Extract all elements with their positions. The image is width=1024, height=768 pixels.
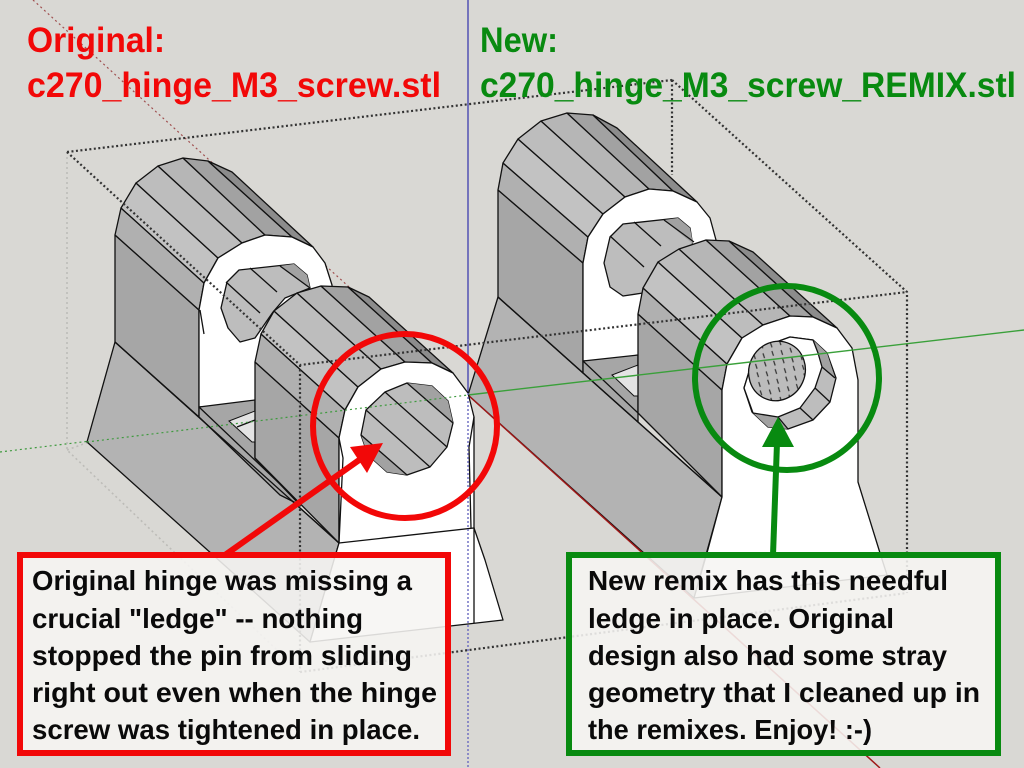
right rear arch bbox=[498, 113, 716, 373]
title: new: c270_hinge_M3_screw_REMIX.stl bbox=[480, 66, 1016, 105]
green highlight circle bbox=[695, 286, 879, 470]
red highlight circle bbox=[313, 334, 497, 518]
dotted guides over the models bbox=[67, 152, 907, 768]
left front white face and flare bbox=[310, 362, 503, 642]
left front arch bbox=[255, 286, 503, 642]
red axis line bbox=[468, 395, 880, 768]
left hinge base bbox=[87, 342, 339, 642]
pin recess bbox=[739, 332, 815, 410]
callout: original hinge: stopped the pin from sliding bbox=[32, 640, 412, 671]
title: original: Original: bbox=[27, 21, 165, 60]
title: original: c270_hinge_M3_screw.stl bbox=[27, 66, 441, 105]
right front white face and flare bbox=[694, 316, 887, 598]
right floor and window bbox=[498, 297, 722, 497]
right hole with new ledge bbox=[739, 332, 836, 429]
callout: new remix: the remixes. Enjoy! :-) bbox=[588, 714, 872, 745]
right front arch bbox=[638, 240, 887, 598]
callout: original hinge: Original hinge was missing a bbox=[32, 565, 412, 596]
callout: new remix bbox=[569, 555, 998, 753]
callout: original hinge: crucial "ledge" -- nothing bbox=[32, 603, 363, 634]
callout: original hinge: screw was tightened in place. bbox=[32, 714, 420, 745]
callout: new remix: ledge in place. Original bbox=[588, 603, 894, 634]
left hole without ledge bbox=[361, 383, 453, 475]
title: new: New: bbox=[480, 21, 558, 60]
right hinge: REMIX model bbox=[468, 113, 887, 598]
callout: original hinge: right out even when the hinge bbox=[32, 677, 437, 708]
callout: new remix: geometry that I cleaned up in bbox=[588, 677, 980, 708]
callout: new remix: New remix has this needful bbox=[588, 565, 948, 596]
left floor and window bbox=[115, 342, 339, 543]
title: new bbox=[480, 21, 1016, 105]
white ledge ring bbox=[744, 337, 822, 417]
callout: original hinge bbox=[20, 555, 448, 753]
title: original bbox=[27, 21, 441, 105]
right hinge base bbox=[468, 297, 722, 598]
callout: new remix: design also had some stray bbox=[588, 640, 947, 671]
axes and bounding box behind the models bbox=[0, 0, 907, 672]
left hinge: original model bbox=[87, 158, 503, 642]
red arrow to hole bbox=[225, 443, 383, 555]
green arrow to ledge bbox=[762, 417, 794, 555]
green axis line bbox=[468, 330, 1024, 395]
left rear arch bbox=[115, 158, 332, 417]
